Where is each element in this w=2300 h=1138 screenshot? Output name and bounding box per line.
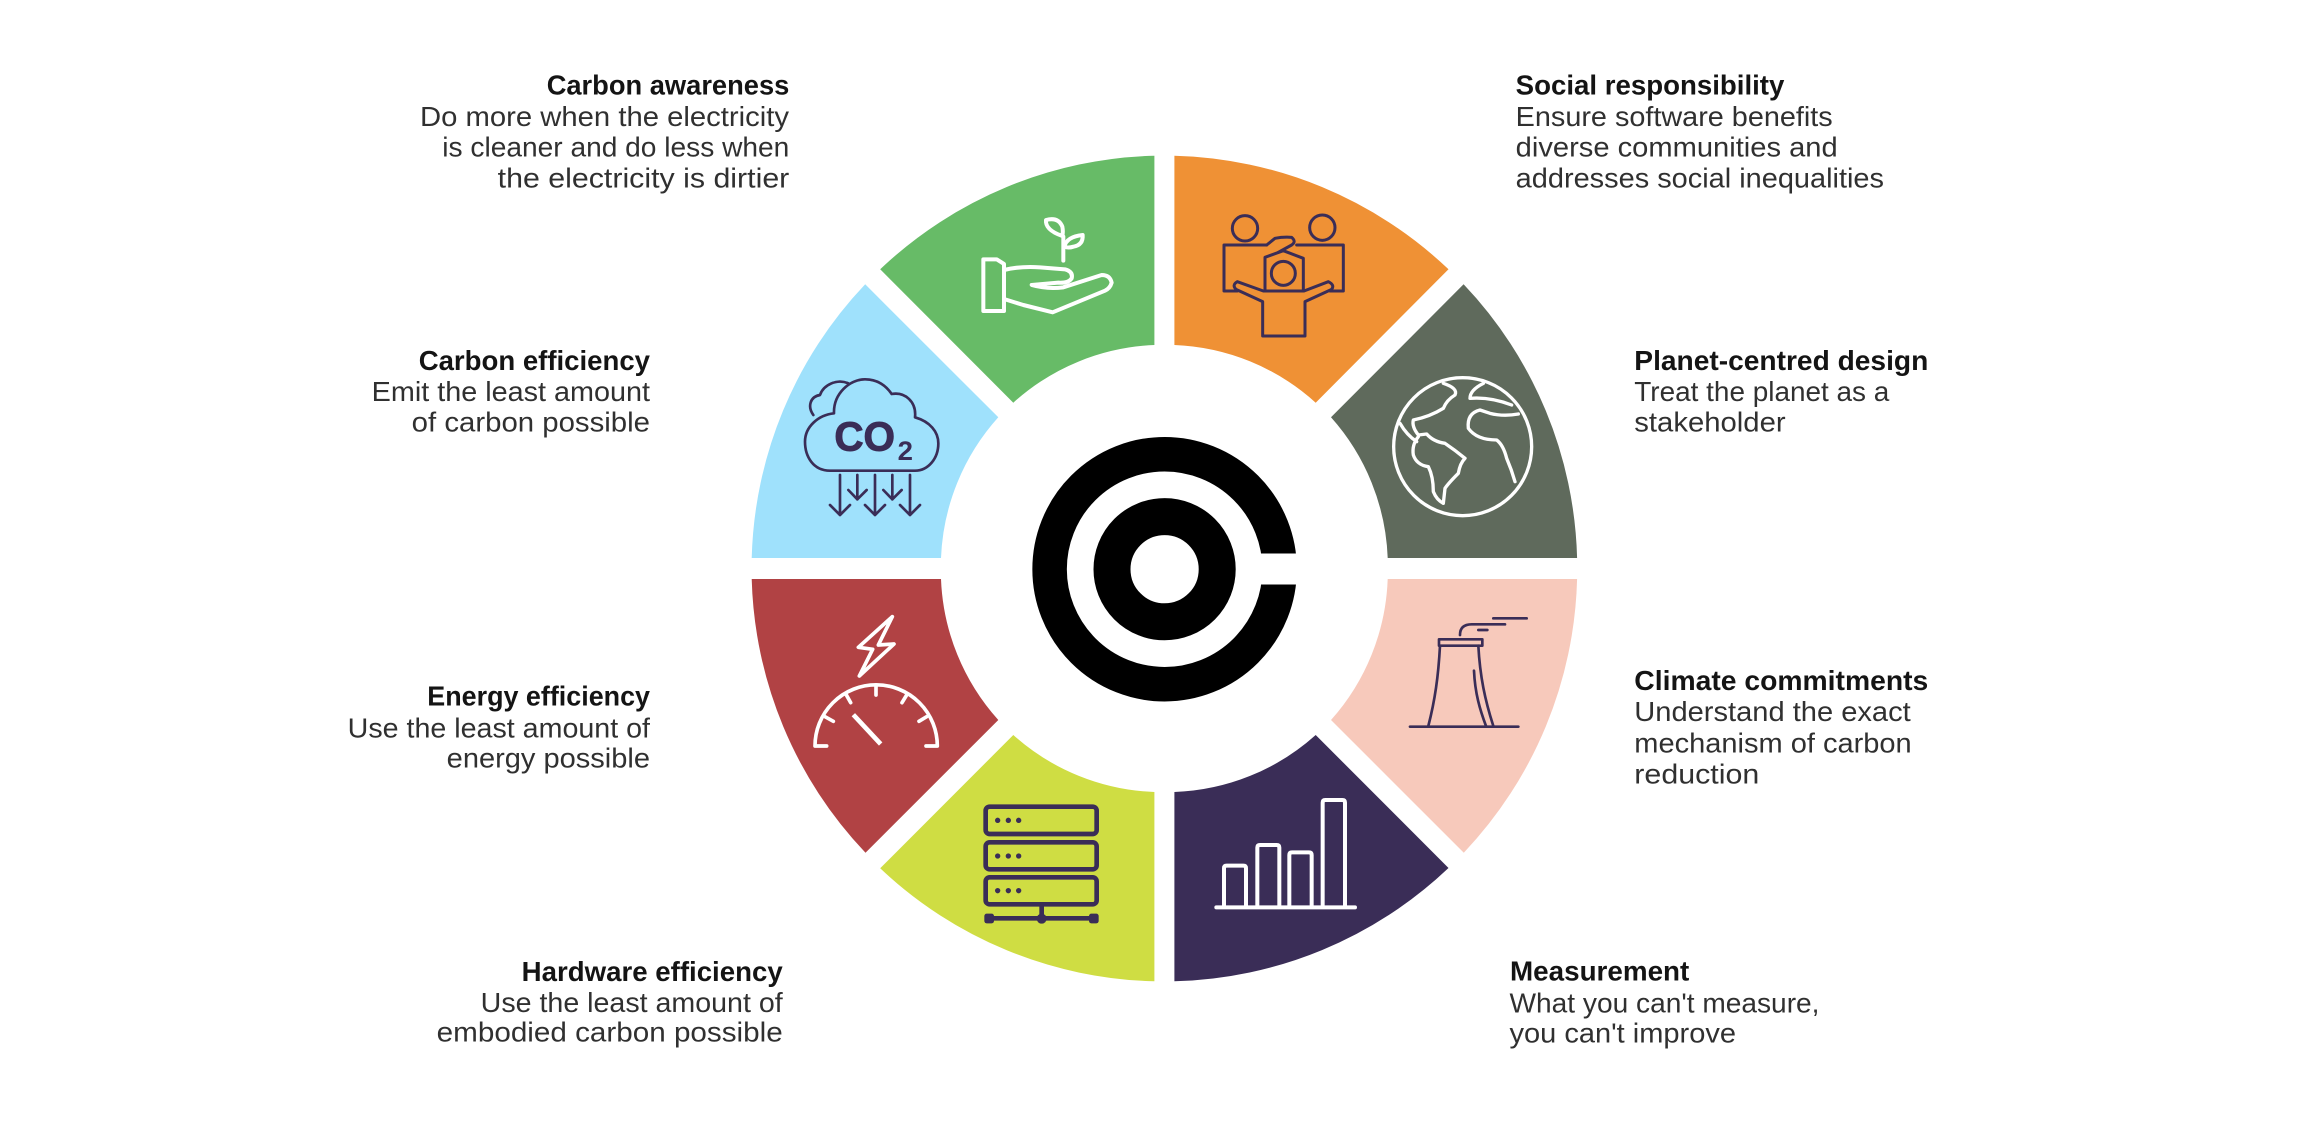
text: climate commitments — [1634, 665, 1928, 789]
text: planet-centred design: stakeholder — [1634, 407, 1786, 438]
text: carbon awareness — [420, 69, 789, 194]
text: measurement: you can't improve — [1510, 1017, 1736, 1048]
icon: gauge with lightning bolt — [815, 617, 937, 746]
icon: bar chart — [1216, 800, 1355, 907]
text: climate commitments: mechanism of carbon — [1634, 727, 1912, 758]
text: carbon efficiency: Emit the least amount — [372, 376, 650, 407]
text: planet-centred design: Treat the planet as a — [1634, 376, 1890, 407]
text: hardware efficiency — [437, 956, 783, 1048]
icon: globe — [1394, 378, 1532, 516]
text: social responsibility: Ensure software benefits — [1516, 101, 1833, 132]
wedge: social responsibility — [1174, 156, 1448, 403]
text: social responsibility: Social responsibility — [1516, 69, 1785, 100]
wedge: climate commitments — [1331, 579, 1577, 853]
wedge: measurement — [1174, 735, 1448, 981]
icon: CO2 cloud with arrows: 2 — [898, 436, 913, 466]
icon: cooling tower — [1410, 618, 1527, 727]
centre logo — [1050, 454, 1310, 684]
text: measurement — [1510, 956, 1820, 1048]
text: energy efficiency — [348, 681, 651, 774]
text: climate commitments: Climate commitments — [1634, 665, 1928, 696]
text: social responsibility — [1516, 69, 1884, 194]
text: social responsibility: addresses social inequalities — [1516, 163, 1884, 194]
icon: people and community — [1224, 215, 1343, 336]
text: hardware efficiency: Hardware efficiency — [522, 956, 783, 987]
text: carbon awareness: the electricity is dirtier — [498, 163, 789, 194]
text: planet-centred design: Planet-centred design — [1634, 345, 1928, 376]
panel: social responsibility segment — [1174, 156, 1448, 403]
icon: CO2 cloud with arrows — [805, 379, 938, 515]
text: climate commitments: reduction — [1634, 758, 1759, 789]
text: social responsibility: diverse communities and — [1516, 132, 1838, 163]
panel: carbon awareness segment — [880, 156, 1154, 403]
text: carbon efficiency: Carbon efficiency — [419, 345, 651, 376]
wedge: hardware efficiency — [880, 735, 1154, 981]
panel: planet-centred design segment — [1331, 284, 1577, 558]
icon: hand holding sprout — [983, 219, 1112, 312]
text: carbon awareness: Do more when the electricity — [420, 101, 789, 132]
wedge: energy efficiency — [752, 579, 998, 853]
text: hardware efficiency: Use the least amount of — [481, 987, 783, 1018]
text: energy efficiency: Use the least amount of — [348, 713, 650, 744]
panel: carbon efficiency segment — [752, 284, 998, 558]
text: planet-centred design — [1634, 345, 1928, 438]
text: measurement: Measurement — [1510, 956, 1689, 987]
panel: measurement segment — [1174, 735, 1448, 981]
text: carbon efficiency: of carbon possible — [412, 407, 650, 438]
panel: climate commitments segment — [1331, 579, 1577, 853]
wedge: carbon efficiency — [752, 284, 998, 558]
text: carbon efficiency — [372, 345, 651, 438]
text: carbon awareness: is cleaner and do less when — [442, 132, 789, 163]
icon: CO2 cloud with arrows: CO — [834, 414, 895, 460]
text: climate commitments: Understand the exact — [1634, 696, 1911, 727]
text: energy efficiency: energy possible — [447, 743, 650, 774]
text: measurement: What you can't measure, — [1510, 987, 1820, 1018]
panel: energy efficiency segment — [752, 579, 998, 853]
wedge: planet-centred design — [1331, 284, 1577, 558]
text: hardware efficiency: embodied carbon possible — [437, 1017, 783, 1048]
icon: server rack — [984, 807, 1099, 924]
wedge: carbon awareness — [880, 156, 1154, 403]
text: carbon awareness: Carbon awareness — [547, 69, 789, 100]
panel: hardware efficiency segment — [880, 735, 1154, 981]
text: energy efficiency: Energy efficiency — [427, 681, 651, 712]
